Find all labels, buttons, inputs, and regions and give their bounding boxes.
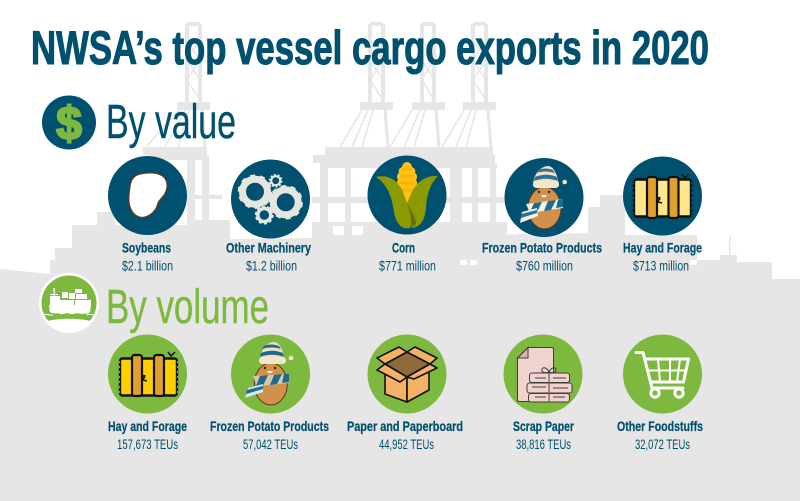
item: paper and paperboard: 44,952 TEUs	[379, 436, 434, 452]
item: frozen potato products (volume)	[210, 334, 329, 452]
item: corn: Corn	[392, 240, 415, 256]
item: frozen potato products (volume): 57,042 TEUs	[243, 436, 298, 452]
item: other machinery: Other Machinery	[226, 240, 311, 256]
item: frozen potato products (volume): Frozen Potato Products	[210, 418, 329, 434]
item: hay and forage (value)	[623, 156, 702, 274]
item: other foodstuffs: 32,072 TEUs	[635, 436, 690, 452]
item: other foodstuffs: Other Foodstuffs	[617, 418, 703, 434]
item: paper and paperboard	[347, 334, 463, 452]
item: hay and forage (volume): Hay and Forage	[108, 418, 187, 434]
item: other machinery: $1.2 billion	[246, 258, 297, 274]
icon: dollar sign	[42, 96, 96, 150]
item: frozen potato products (value): $760 million	[516, 258, 573, 274]
item: scrap paper: 38,816 TEUs	[516, 436, 571, 452]
item: hay and forage (volume): 157,673 TEUs	[117, 436, 178, 452]
item: soybeans: $2.1 billion	[122, 258, 173, 274]
heading: by value: By value	[106, 96, 236, 149]
item: paper and paperboard: Paper and Paperboard	[347, 418, 463, 434]
item: scrap paper: Scrap Paper	[513, 418, 574, 434]
item: soybeans	[108, 156, 187, 274]
item: corn: $771 million	[379, 258, 436, 274]
item: frozen potato products (value)	[482, 158, 602, 274]
heading: by volume: By volume	[106, 281, 269, 334]
icon: dollar sign: $	[56, 97, 82, 149]
item: soybeans: Soybeans	[122, 240, 171, 256]
item: other foodstuffs	[617, 334, 703, 452]
item: other machinery	[226, 160, 311, 274]
item: hay and forage (value): $713 million	[633, 258, 689, 274]
icon: container ship	[39, 273, 99, 333]
item: scrap paper	[504, 334, 582, 452]
item: corn	[368, 156, 446, 274]
item: hay and forage (volume)	[108, 334, 187, 452]
item: frozen potato products (value): Frozen Potato Products	[482, 240, 602, 256]
item: hay and forage (value): Hay and Forage	[623, 240, 702, 256]
